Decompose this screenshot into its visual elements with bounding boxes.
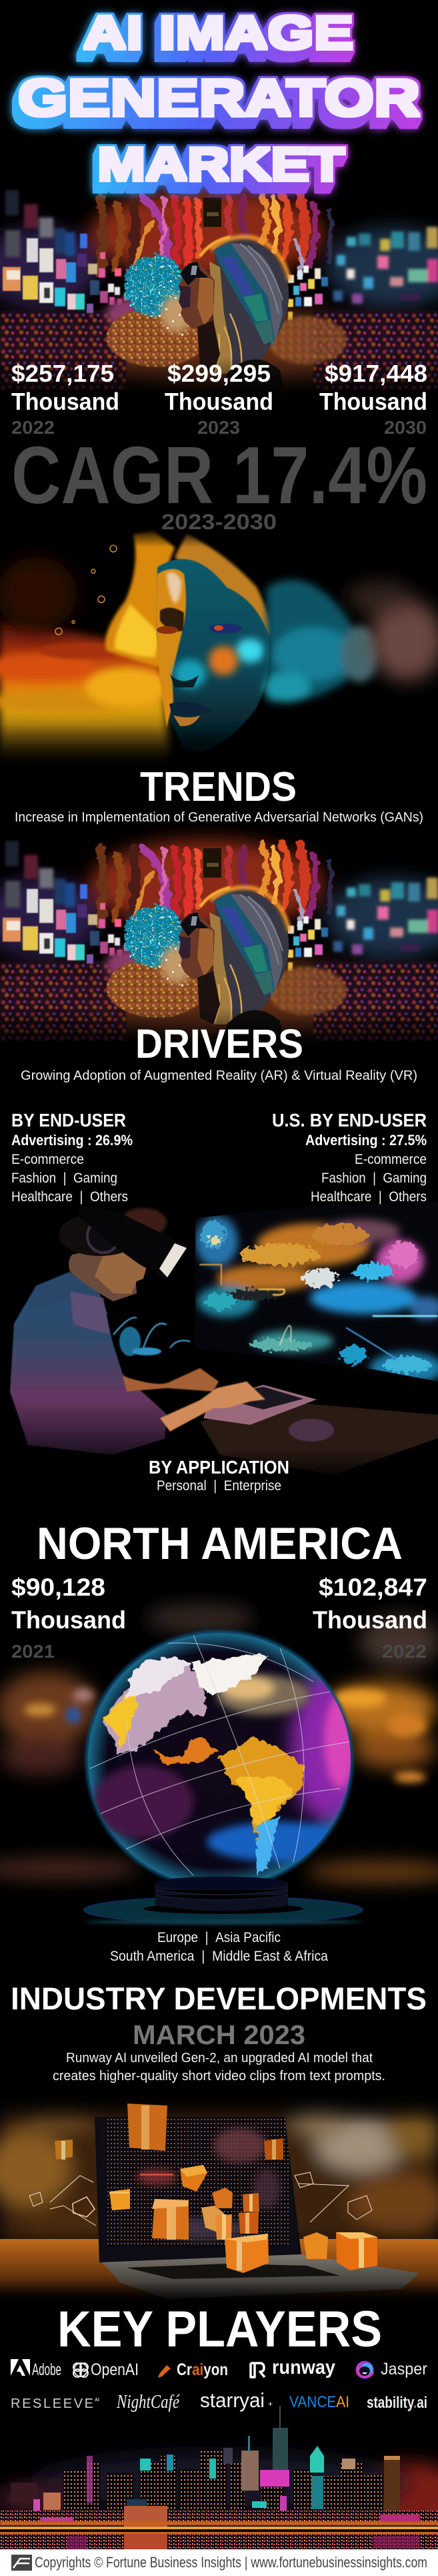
development text [53,2051,385,2083]
logo: starryai: + [268,2399,273,2408]
keyboard [203,1385,317,1425]
development text: creates higher-quality short video clips from text prompts. [53,2069,385,2083]
image: glowing globe [0,1604,438,1925]
sky glow [0,2453,438,2536]
north america heading: NORTH AMERICA [37,1518,403,1569]
logo: VanceAI: VANCEAI [289,2393,349,2411]
parcels [55,2104,377,2273]
north america stat 2022 [313,1574,427,1662]
wireframes [29,2172,372,2226]
other regions [110,1930,328,1964]
head with headset [59,1205,187,1301]
north america stat 2022: 2022 [382,1641,427,1662]
segment: by end-user [11,1110,133,1205]
drivers text: Growing Adoption of Augmented Reality (AR) & Virtual Reality (VR) [21,1068,417,1083]
segment: by application: BY APPLICATION [149,1457,289,1478]
logo: runway [251,2356,335,2378]
trends heading: TRENDS [140,764,297,810]
segment: U.S. by end-user [272,1110,427,1205]
segment: by end-user: Advertising : 26.9% [11,1132,133,1149]
stat 2023 [165,360,273,438]
development text: Runway AI unveiled Gen-2, an upgraded AI model that [66,2051,373,2065]
footer logo [11,2555,32,2571]
logo: Jasper [356,2360,427,2378]
stat 2023: $299,295 [167,360,271,387]
stat 2023: Thousand [165,388,273,415]
particle cloud [106,255,347,367]
industry developments heading: INDUSTRY DEVELOPMENTS [11,1981,427,2016]
logo: OpenAI: OpenAI [91,2360,139,2379]
north america stat 2021: $90,128 [11,1574,105,1601]
segment: by application: Personal | Enterprise [157,1478,281,1494]
segment: by end-user: BY END-USER [11,1110,126,1131]
trends text: Increase in Implementation of Generative Adversarial Networks (GANs) [15,810,423,825]
hoodie [10,1272,167,1455]
north america stat 2021: Thousand [11,1606,126,1634]
logo: Resleeve: RESLEEVE [11,2396,93,2411]
north america stat 2022: Thousand [313,1606,427,1634]
dark buildings [63,2449,383,2519]
holographic screen [195,1201,438,1384]
globe stand [84,1877,363,1923]
logo: Craiyon: Craiyon [177,2360,228,2379]
logo: Adobe: Adobe [32,2360,61,2379]
globe sphere [85,1630,353,1889]
floor bokeh [0,310,438,390]
stat 2022: Thousand [11,388,119,415]
mouse [289,1419,334,1441]
segment: by end-user: Healthcare | Others [11,1189,128,1205]
logo: Craiyon [158,2360,228,2379]
stat 2023: 2023 [197,417,240,438]
bokeh backdrop [0,2085,438,2302]
north america stat 2021: 2021 [11,1641,55,1662]
stat 2030 [319,360,427,438]
segment: by end-user: E-commerce [11,1152,84,1167]
segment: U.S. by end-user: Healthcare | Others [311,1189,427,1205]
segment: U.S. by end-user: Fashion | Gaming [321,1171,427,1186]
logos row two [11,2388,427,2412]
image: laptop with parcels [0,2085,438,2306]
logos row one [11,2356,427,2379]
stat 2030: $917,448 [325,360,427,387]
segment: U.S. by end-user: E-commerce [355,1152,427,1167]
title: MARKET [97,138,345,190]
laptop base [101,2254,419,2299]
other regions: South America | Middle East & Africa [110,1949,328,1964]
image: neon city skyline [0,2406,438,2549]
stat 2030: Thousand [319,388,427,415]
development date: MARCH 2023 [133,2019,305,2050]
title [18,7,420,190]
segment: by application [149,1457,289,1494]
laptop screen [95,2117,301,2262]
image: VR user at keyboard [0,1201,438,1482]
drivers heading: DRIVERS [135,1021,303,1066]
other regions: Europe | Asia Pacific [157,1930,281,1945]
desk [200,1401,438,1475]
stat 2022 [11,360,119,438]
logo: Adobe [11,2359,61,2379]
waterfront lights [0,2506,438,2549]
segment: by end-user: Fashion | Gaming [11,1171,117,1186]
arms and hands [123,1368,265,1431]
stat 2022: $257,175 [11,360,114,387]
footer [0,2549,438,2576]
key players heading: KEY PLAYERS [57,2301,382,2358]
image: woman with image mosaic [0,190,438,404]
logo: runway: runway [272,2356,335,2378]
desk hologram [113,1317,190,1356]
segment: U.S. by end-user: Advertising : 27.5% [305,1132,427,1149]
title: GENERATOR [18,69,420,127]
CAGR period: 2023-2030 [161,510,277,534]
logo: stability.ai: stability.ai [367,2394,427,2412]
logo: starryai: starryai [200,2388,265,2412]
market stats [11,360,427,438]
image: woman with image mosaic repeated [0,840,438,1054]
image: fire and water face [0,527,438,771]
title: AI IMAGE [83,7,353,59]
lit towers [11,2406,400,2514]
logo: NightCafe: NightCafé [116,2391,180,2412]
stat 2030: 2030 [384,417,427,438]
north america stat 2022: $102,847 [319,1574,427,1601]
segment: U.S. by end-user: U.S. BY END-USER [272,1110,427,1131]
city bokeh background [0,1604,438,1883]
logo: Resleeve: AI [95,2398,99,2402]
north america stat 2021 [11,1574,126,1662]
logo: OpenAI [73,2360,139,2379]
stat 2022: 2022 [11,417,55,438]
logo: Jasper: Jasper [381,2360,427,2378]
woman head [179,237,289,400]
